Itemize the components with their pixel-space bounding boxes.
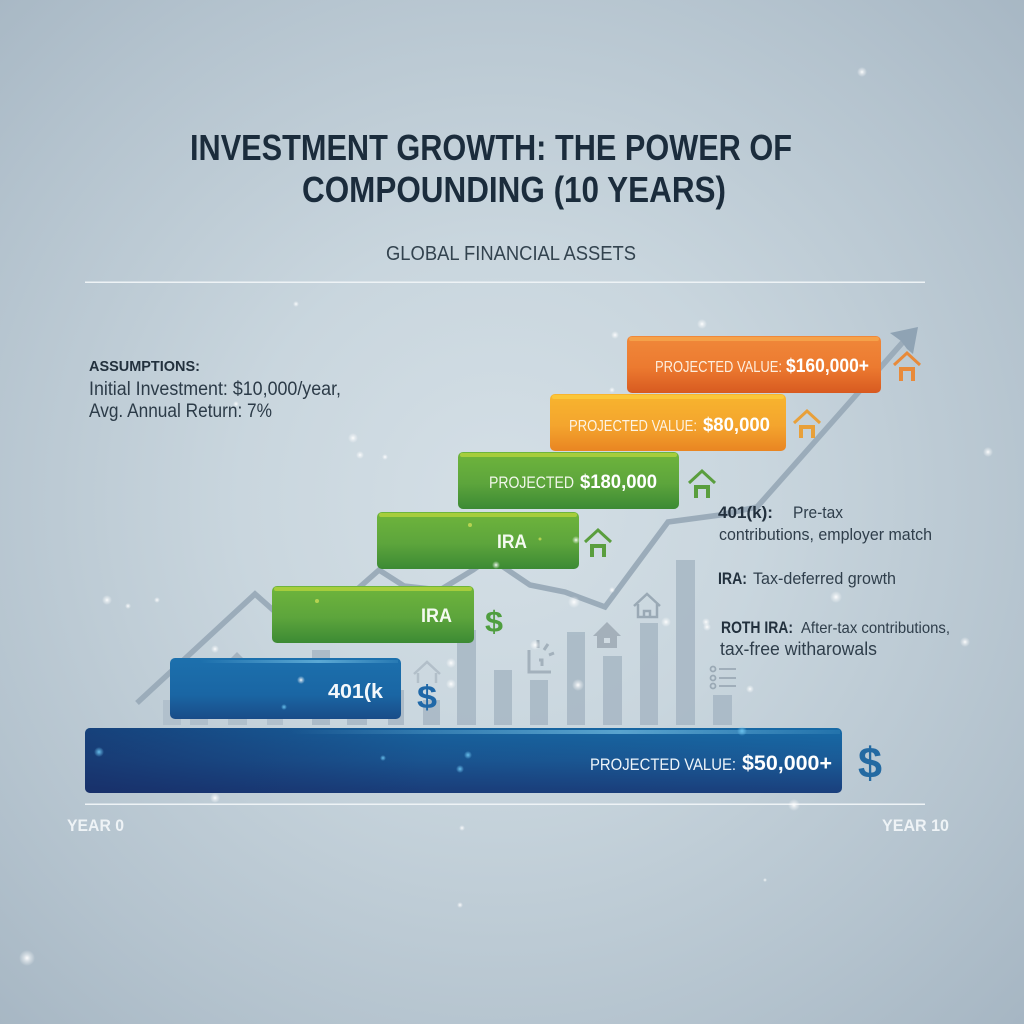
icon: filled house door [604, 638, 610, 643]
Roth IRA description: tax-free witharowals [720, 638, 877, 659]
title: INVESTMENT GROWTH: THE POWER OF [190, 127, 792, 168]
bar: projected 80,000: $80,000 [703, 415, 770, 436]
401(k) description [718, 503, 932, 544]
icon: document chart [529, 640, 554, 672]
background icons [229, 594, 736, 688]
bar: 401(k): 401(k [328, 681, 384, 703]
bar: projected 160,000+: $160,000+ [786, 356, 869, 377]
icon: outlined house [634, 594, 660, 617]
bar: IRA lower [272, 586, 474, 643]
bar: projected 80,000 [550, 394, 786, 451]
title [190, 127, 792, 210]
401(k) description: contributions, employer match [719, 526, 932, 544]
Roth IRA description: ROTH IRA: [721, 619, 793, 637]
bar: projected 180,000: $180,000 [580, 472, 657, 493]
assumptions text block: ASSUMPTIONS: [89, 358, 200, 375]
icon: checklist [710, 666, 736, 688]
assumptions text block: Avg. Annual Return: 7% [89, 401, 272, 422]
base bar: year 10 value [85, 728, 842, 793]
icon: dollar blue: $ [417, 679, 437, 715]
bar: projected 180,000 [458, 452, 679, 509]
icon: house orange [894, 353, 920, 381]
icon: filled house [593, 622, 621, 648]
icon: dollar base: $ [858, 739, 882, 788]
bar: IRA upper [377, 512, 579, 569]
assumptions text block [89, 358, 341, 422]
growth trend line with arrow [137, 327, 918, 703]
base bar: year 10 value: PROJECTED VALUE: [590, 755, 736, 774]
icon: house yellow [794, 411, 820, 438]
assumptions text block: Initial Investment: $10,000/year, [89, 379, 341, 400]
base bar: year 10 value: $50,000+ [742, 752, 832, 775]
401(k) description: Pre-tax [793, 504, 844, 522]
icon: house green lower [585, 530, 611, 557]
bar: 401(k) [170, 658, 401, 719]
icon: faint house left [229, 652, 245, 660]
401(k) description: 401(k): [718, 503, 773, 522]
background bar chart [163, 560, 732, 725]
bar: projected 80,000: PROJECTED VALUE: [569, 418, 697, 435]
axis label: year 0: YEAR 0 [67, 817, 124, 835]
IRA description: IRA: [718, 569, 747, 588]
bar: IRA upper: IRA [497, 532, 527, 553]
icon: dollar green: $ [485, 606, 503, 639]
axis label: year 10: YEAR 10 [882, 817, 949, 835]
bar: projected 160,000+: PROJECTED VALUE: [655, 359, 782, 376]
bar: projected 160,000+ [627, 336, 881, 393]
bar: projected 180,000: PROJECTED [489, 474, 574, 492]
title: COMPOUNDING (10 YEARS) [302, 169, 726, 210]
icon: house green upper [689, 471, 715, 498]
Roth IRA description [720, 619, 950, 659]
Roth IRA description: After-tax contributions, [801, 620, 950, 637]
IRA description: Tax-deferred growth [753, 570, 896, 588]
icon: faint house behind dollar [414, 662, 440, 683]
account descriptions [718, 503, 950, 659]
bar: IRA lower: IRA [421, 606, 452, 627]
subtitle: GLOBAL FINANCIAL ASSETS [386, 243, 636, 265]
